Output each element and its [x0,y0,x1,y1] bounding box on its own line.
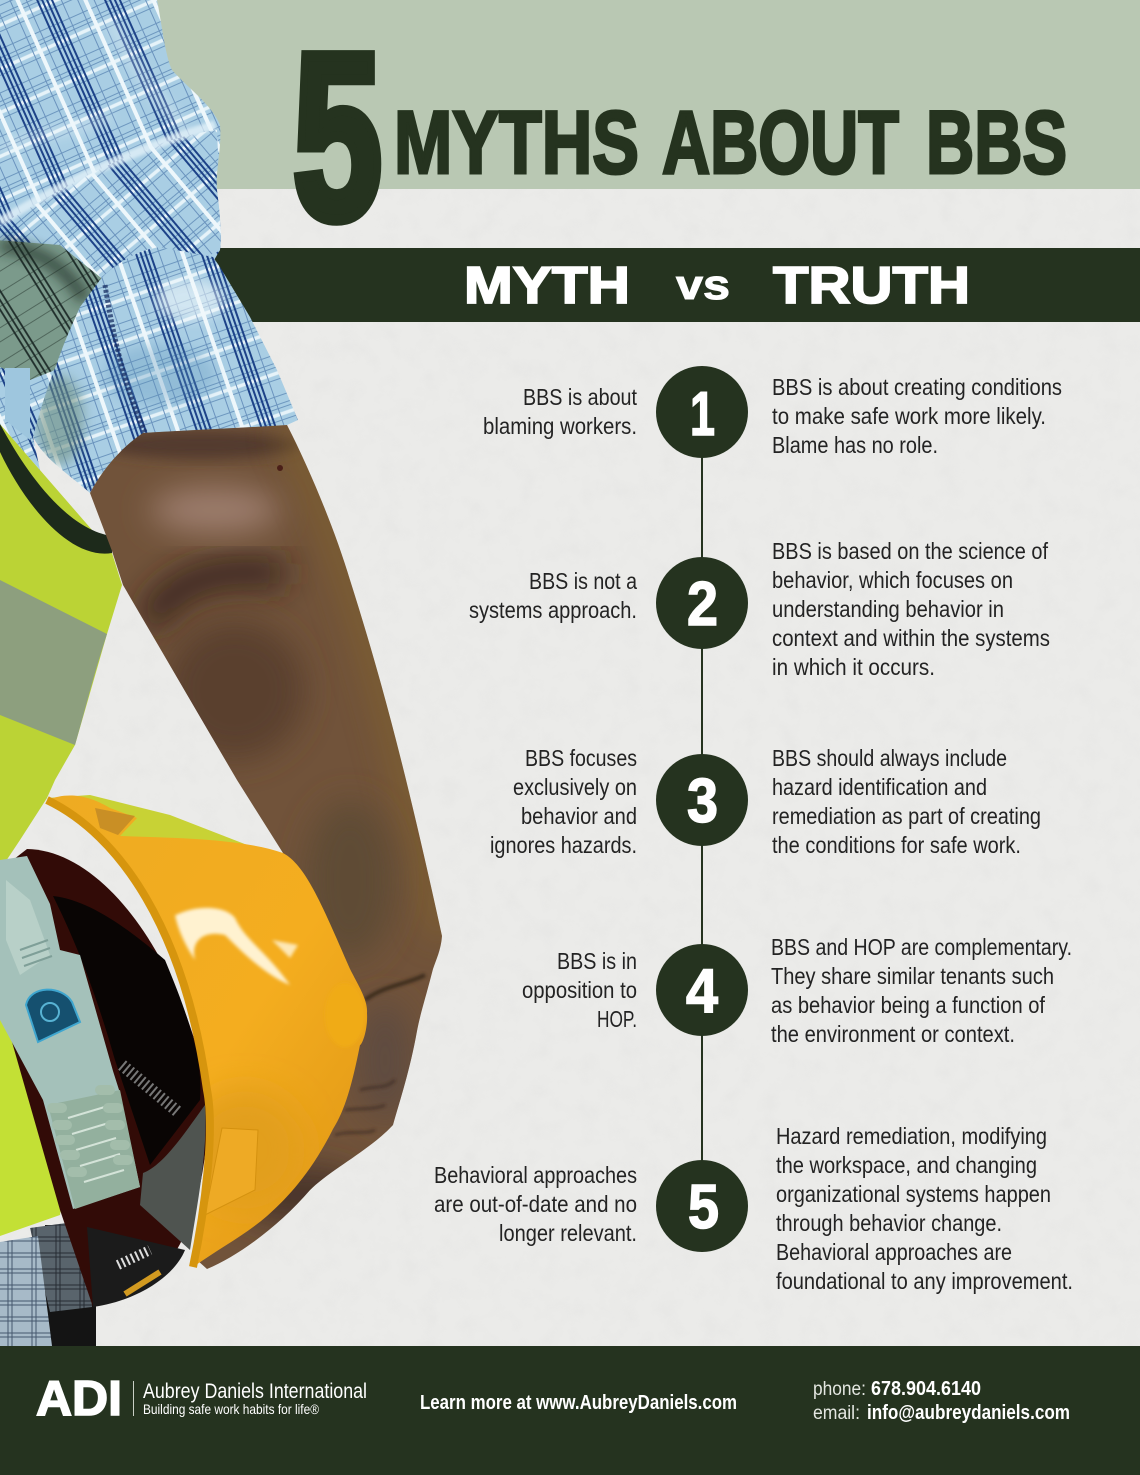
myth 4: opposition to [522,977,637,1003]
myth 2: systems approach. [469,597,637,623]
myth 3 [490,745,637,858]
myth 3: behavior and [521,803,637,829]
truth 5: foundational to any improvement. [776,1268,1073,1294]
truth 3: BBS should always include [772,745,1007,771]
title [293,5,1067,269]
row 2 [469,538,1050,680]
title: ABOUT [662,92,899,192]
truth 4 [771,934,1072,1047]
number 1: 1 [690,380,715,449]
truth 5: organizational systems happen [776,1181,1051,1207]
vest [0,424,260,1236]
truth 2: context and within the systems [772,625,1050,651]
myth 3: BBS focuses [525,745,637,771]
truth 4: as behavior being a function of [771,992,1046,1018]
myth 5 [434,1162,637,1246]
number 2: 2 [687,570,718,639]
number 3: 3 [687,767,718,836]
myth 2: BBS is not a [529,568,637,594]
truth 5: the workspace, and changing [776,1152,1037,1178]
truth 2: understanding behavior in [772,596,1004,622]
number 1 [656,366,748,458]
title: MYTHS [394,92,639,192]
truth 1: Blame has no role. [772,432,938,458]
row 4 [522,934,1072,1047]
myth 1: BBS is about [523,384,638,410]
truth 2: BBS is based on the science of [772,538,1049,564]
number 3 [656,754,748,846]
contact details: info@aubreydaniels.com [867,1402,1070,1424]
myth 2 [469,568,637,623]
truth 4: BBS and HOP are complementary. [771,934,1072,960]
contact details: 678.904.6140 [871,1378,981,1400]
myth 5: are out-of-date and no [434,1191,637,1217]
truth 1 [772,374,1062,458]
myth 3: ignores hazards. [490,832,637,858]
number 2 [656,557,748,649]
myth 4: HOP. [597,1006,637,1032]
truth 3 [772,745,1041,858]
contact details: phone: [813,1379,866,1400]
truth 2: behavior, which focuses on [772,567,1013,593]
row 1 [483,366,1062,458]
myth 4: BBS is in [557,948,637,974]
truth 3: remediation as part of creating [772,803,1041,829]
truth 5: Hazard remediation, modifying [776,1123,1047,1149]
truth 5: Behavioral approaches are [776,1239,1012,1265]
banner: myth vs truth: vs [676,261,730,308]
truth 1: to make safe work more likely. [772,403,1046,429]
shirt lower hem and trousers [0,1220,96,1346]
myth 5: longer relevant. [499,1220,637,1246]
truth 3: the conditions for safe work. [772,832,1021,858]
timeline connector [701,412,703,1206]
myth 3: exclusively on [513,774,637,800]
row 3 [490,745,1041,858]
arm and hand [90,425,442,1269]
website link: Learn more at www.AubreyDaniels.com [420,1392,737,1414]
logo: ADI: Aubrey Daniels International [143,1380,367,1403]
hard hat [0,795,367,1307]
photo: worker holding a hard hat [0,0,442,1346]
truth 3: hazard identification and [772,774,987,800]
truth 4: They share similar tenants such [771,963,1054,989]
banner: myth vs truth: TRUTH [773,257,970,315]
number 4 [656,944,748,1036]
logo: ADI: Building safe work habits for life® [143,1401,320,1417]
title: 5 [293,5,382,269]
truth 2: in which it occurs. [772,654,935,680]
banner: myth vs truth: MYTH [464,257,630,315]
truth 2 [772,538,1050,680]
myth 1 [483,384,638,439]
myth 4 [522,948,637,1032]
contact details [813,1378,1070,1424]
footer [0,1346,1140,1475]
myth 1: blaming workers. [483,413,637,439]
title band [155,0,1140,189]
truth 5: through behavior change. [776,1210,1002,1236]
truth 4: the environment or context. [771,1021,1015,1047]
truth 5 [776,1123,1073,1294]
banner: myth vs truth [200,248,1140,322]
row 5 [434,1123,1073,1294]
helmet suspension strap [0,856,206,1307]
number 5: 5 [688,1173,719,1242]
contact details: email: [813,1403,860,1424]
number 5 [656,1160,748,1252]
logo: ADI: ADI [36,1372,122,1426]
myth 5: Behavioral approaches [434,1162,637,1188]
shirt sleeve [0,0,298,493]
truth 1: BBS is about creating conditions [772,374,1062,400]
title: BBS [926,92,1067,192]
number 4: 4 [686,957,718,1026]
logo: ADI [36,1372,367,1426]
